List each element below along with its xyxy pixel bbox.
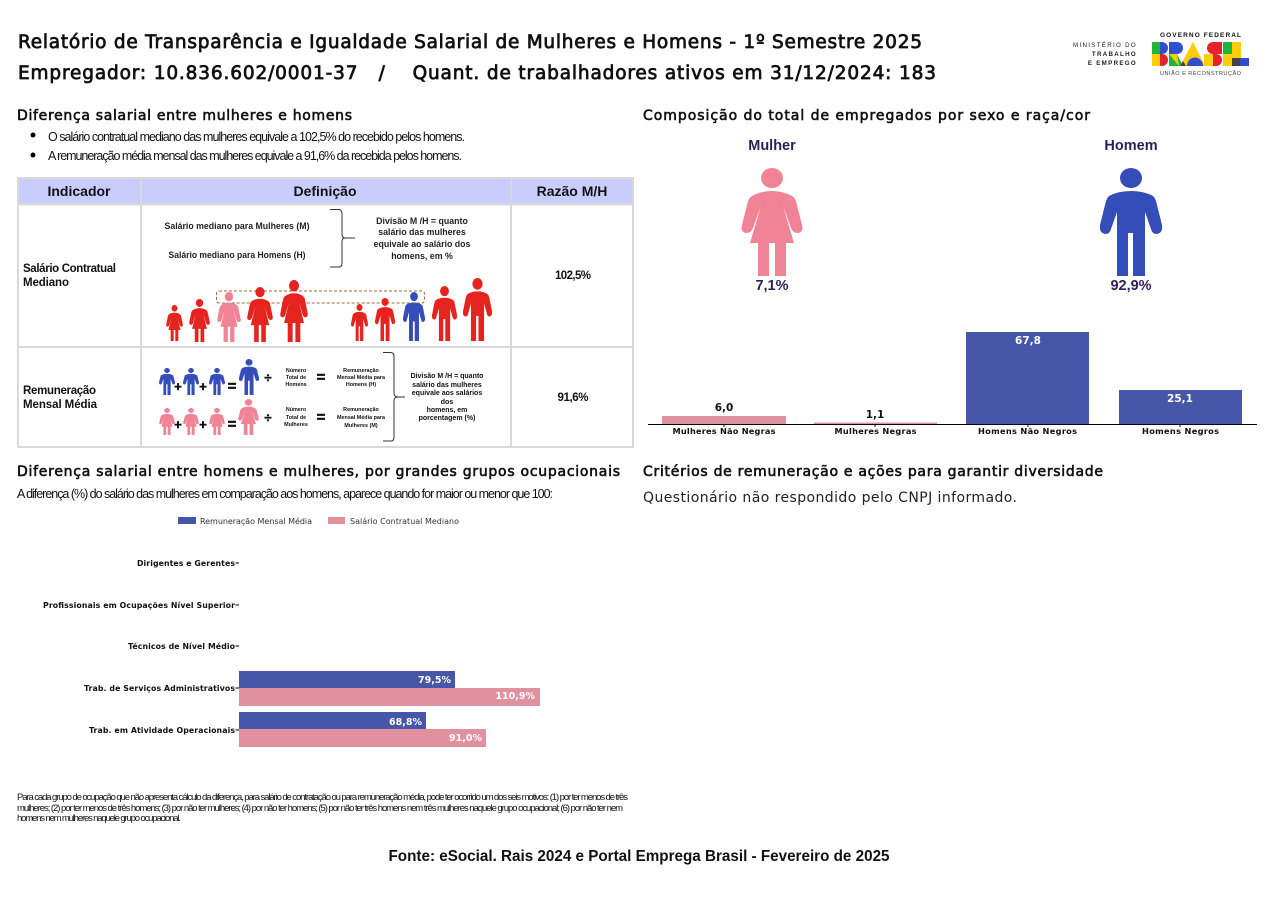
row: remuneração mensal média: Mensal Média bbox=[23, 399, 98, 411]
row: remuneração mensal média: = bbox=[317, 369, 326, 386]
bar chart: grupos ocupacionais: 91,0% bbox=[449, 733, 482, 744]
icons: mulheres bbox=[166, 280, 308, 342]
logo: ministério: TRABALHO bbox=[1092, 51, 1137, 58]
pictogram: mulher: 7,1% bbox=[755, 278, 789, 294]
row: salário contratual mediano: Salário mediano para Mulheres (M) bbox=[164, 221, 310, 231]
bullet list bbox=[30, 130, 465, 163]
row: remuneração mensal média: salário das mulheres bbox=[412, 382, 482, 389]
logo: governo federal brasil: UNIÃO E RECONSTRUÇÃO bbox=[1160, 70, 1242, 77]
bar chart: sexo e raça: Homens Negros bbox=[1142, 426, 1219, 436]
row: remuneração mensal média: + bbox=[199, 417, 207, 432]
footnote bbox=[17, 792, 628, 824]
row: remuneração mensal média: Total de bbox=[286, 375, 306, 381]
legend: Remuneração Mensal Média bbox=[200, 516, 312, 526]
heading: critérios: Critérios de remuneração e ações para garantir diversidade bbox=[643, 464, 1103, 480]
table header: Definição bbox=[293, 183, 357, 199]
logo: ministério: E EMPREGO bbox=[1088, 60, 1137, 67]
row: remuneração mensal média: Mulheres bbox=[284, 422, 308, 428]
bar chart: sexo e raça: 1,1 bbox=[866, 409, 884, 421]
row: remuneração mensal média: Remuneração bbox=[343, 407, 380, 413]
row: salário contratual mediano: homens, em % bbox=[391, 251, 453, 261]
bar chart: sexo e raça: Mulheres Não Negras bbox=[672, 426, 776, 436]
row: remuneração mensal média: + bbox=[174, 417, 182, 432]
row: remuneração mensal média: 91,6% bbox=[558, 392, 588, 404]
row: remuneração mensal média: ÷ bbox=[264, 410, 272, 425]
footnote: homens nem mulheres naquele grupo ocupacional. bbox=[17, 813, 181, 824]
title: Empregador: 10.836.602/0001-37 / Quant. de trabalhadores ativos em 31/12/2024: 183 bbox=[18, 63, 936, 84]
row: salário contratual mediano: Salário mediano para Homens (H) bbox=[168, 250, 306, 260]
row: remuneração mensal média: Total de bbox=[286, 415, 306, 421]
bar chart: grupos ocupacionais: Trab. de Serviços Administrativos bbox=[84, 684, 235, 693]
bar chart: grupos ocupacionais: Dirigentes e Gerentes bbox=[137, 559, 235, 568]
bar chart: sexo e raça: Homens Não Negros bbox=[978, 426, 1077, 436]
row: remuneração mensal média: Homens (H) bbox=[346, 382, 376, 388]
row: remuneração mensal média: Divisão M /H = quanto bbox=[411, 373, 483, 380]
row: remuneração mensal média: equivale aos salários bbox=[412, 390, 482, 397]
bullet list: A remuneração média mensal das mulheres equivale a 91,6% da recebida pelos homens. bbox=[48, 149, 462, 163]
legend: Salário Contratual Mediano bbox=[350, 517, 459, 526]
row: remuneração mensal média: + bbox=[174, 379, 182, 394]
row: salário contratual mediano: equivale ao salário dos bbox=[374, 239, 471, 249]
table header: Razão M/H bbox=[537, 183, 607, 199]
row: remuneração mensal média: Número bbox=[286, 368, 307, 374]
bar chart: grupos ocupacionais: 68,8% bbox=[389, 717, 422, 728]
heading: diferença salarial: Diferença salarial entre mulheres e homens bbox=[17, 108, 352, 124]
pictogram: homem bbox=[1100, 138, 1162, 294]
bar chart: grupos ocupacionais: Técnicos de Nível Médio bbox=[128, 642, 236, 651]
row: remuneração mensal média: = bbox=[228, 416, 237, 433]
legend bbox=[178, 516, 459, 526]
table header: Indicador bbox=[47, 183, 111, 199]
title: Relatório de Transparência e Igualdade Salarial de Mulheres e Homens - 1º Semestre 2025 bbox=[18, 32, 922, 53]
row: remuneração mensal média: Remuneração bbox=[23, 385, 96, 397]
logo: governo federal brasil bbox=[1152, 32, 1249, 77]
row: remuneração mensal média: Mensal Média para bbox=[337, 375, 386, 381]
row: salário contratual mediano: Mediano bbox=[23, 277, 69, 289]
row: salário contratual mediano bbox=[23, 210, 591, 342]
bar chart: grupos ocupacionais: 79,5% bbox=[418, 675, 451, 686]
bar chart: grupos ocupacionais: 110,9% bbox=[495, 691, 535, 702]
row: remuneração mensal média: homens, em bbox=[427, 407, 467, 414]
row: remuneração mensal média: ÷ bbox=[264, 370, 272, 385]
row: salário contratual mediano: salário das mulheres bbox=[378, 227, 466, 237]
bar chart: grupos ocupacionais: Profissionais em Ocupações Nível Superior bbox=[43, 601, 235, 610]
title bbox=[18, 32, 936, 84]
row: remuneração mensal média: = bbox=[228, 378, 237, 395]
row: remuneração mensal média: Número bbox=[286, 407, 307, 413]
bar chart: grupos ocupacionais bbox=[43, 559, 540, 747]
row: remuneração mensal média bbox=[23, 352, 588, 441]
subtitle: diferença: A diferença (%) do salário das mulheres em comparação aos homens, aparece quando for maior ou menor que 100: bbox=[17, 487, 553, 501]
row: remuneração mensal média: dos bbox=[441, 399, 453, 406]
bar chart: sexo e raça: Mulheres Negras bbox=[834, 426, 917, 436]
heading: composição: Composição do total de empregados por sexo e raça/cor bbox=[643, 108, 1090, 124]
row: remuneração mensal média: Homens bbox=[285, 382, 307, 388]
bar chart: sexo e raça: 67,8 bbox=[1015, 335, 1041, 347]
bar chart: sexo e raça bbox=[648, 332, 1257, 436]
row: remuneração mensal média: Remuneração bbox=[343, 368, 380, 374]
equation: homens bbox=[159, 359, 259, 395]
table header bbox=[19, 179, 632, 204]
text: questionário: Questionário não respondido pelo CNPJ informado. bbox=[643, 490, 1017, 506]
footnote: mulheres; (2) por ter menos de três homens; (3) por não ter mulheres; (4) por não ter homens; (5) por não ter três homens nem três mulheres naquele grupo ocupacional; (6) por não ter nem bbox=[17, 803, 623, 814]
pictogram: homem: Homem bbox=[1104, 138, 1158, 154]
logo: ministério bbox=[1073, 42, 1137, 67]
bar chart: sexo e raça: 25,1 bbox=[1167, 393, 1193, 405]
table: indicadores bbox=[18, 178, 633, 447]
row: salário contratual mediano: 102,5% bbox=[555, 270, 591, 282]
logo: ministério: MINISTÉRIO DO bbox=[1073, 42, 1137, 49]
pictogram: homem: 92,9% bbox=[1110, 278, 1152, 294]
row: salário contratual mediano: Salário Contratual bbox=[23, 263, 116, 275]
row: remuneração mensal média: + bbox=[199, 379, 207, 394]
bar chart: grupos ocupacionais: Trab. em Atividade Operacionais bbox=[89, 726, 235, 735]
pictogram: mulher bbox=[742, 138, 802, 294]
heading: diferença por grupos ocupacionais: Diferença salarial entre homens e mulheres, por grandes grupos ocupacionais bbox=[17, 464, 620, 480]
footnote: Para cada grupo de ocupação que não apresenta cálculo da diferença, para salário de contratação ou para remuneração média, pode ter ocorrido um dos seis motivos: (1) por ter menos de três bbox=[17, 792, 628, 803]
row: remuneração mensal média: Mulheres (M) bbox=[344, 423, 378, 429]
logo: governo federal brasil: GOVERNO FEDERAL bbox=[1160, 32, 1241, 39]
row: salário contratual mediano: Divisão M /H = quanto bbox=[376, 216, 468, 226]
equation: mulheres bbox=[159, 399, 259, 435]
footer: fonte: Fonte: eSocial. Rais 2024 e Portal Emprega Brasil - Fevereiro de 2025 bbox=[388, 848, 890, 865]
row: remuneração mensal média: = bbox=[317, 409, 326, 426]
row: remuneração mensal média: Mensal Média para bbox=[337, 415, 386, 421]
icons: homens bbox=[351, 278, 492, 341]
bullet list: O salário contratual mediano das mulheres equivale a 102,5% do recebido pelos homens. bbox=[48, 130, 465, 144]
row: remuneração mensal média: porcentagem (%) bbox=[419, 415, 475, 422]
bar chart: sexo e raça: 6,0 bbox=[715, 402, 733, 414]
pictogram: mulher: Mulher bbox=[748, 138, 796, 154]
